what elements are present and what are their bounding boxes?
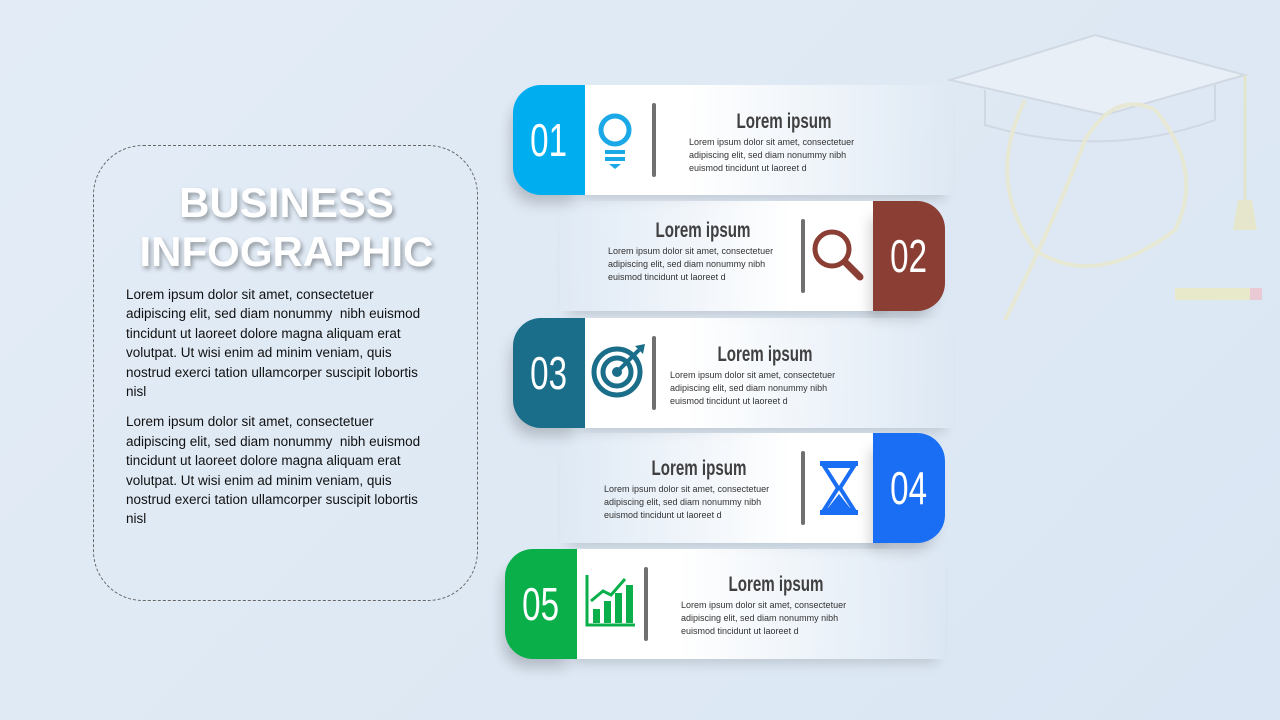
title: BUSINESS — [179, 179, 394, 226]
card 05: Lorem ipsum dolor sit amet, consectetuer adipiscing elit, sed diam nonummy nibh euismod tincidunt ut laoreet d — [681, 600, 846, 636]
card 02: 02 — [891, 230, 927, 282]
card 04: Lorem ipsum — [652, 457, 746, 480]
card 04 — [565, 433, 945, 557]
watermark: graduation cap logo — [946, 34, 1262, 321]
card 04: Lorem ipsum dolor sit amet, consectetuer adipiscing elit, sed diam nonummy nibh euismod tincidunt ut laoreet d — [604, 484, 769, 520]
icon: magnifier — [812, 230, 864, 280]
icon: hourglass — [820, 461, 858, 515]
card 03 — [504, 318, 948, 442]
card 04: 04 — [891, 462, 927, 514]
body text: adipiscing elit, sed diam nonummy nibh euismod — [126, 434, 420, 449]
card 05: 05 — [523, 578, 559, 630]
body text — [126, 287, 420, 526]
card 01 — [504, 85, 948, 210]
body text: nisl — [126, 511, 146, 526]
card 01: Lorem ipsum dolor sit amet, consectetuer adipiscing elit, sed diam nonummy nibh euismod tincidunt ut laoreet d — [689, 137, 854, 173]
panel: intro box — [93, 145, 478, 601]
card 02: Lorem ipsum dolor sit amet, consectetuer adipiscing elit, sed diam nonummy nibh euismod tincidunt ut laoreet d — [608, 246, 773, 282]
card 05 — [496, 549, 940, 674]
icon: bar chart — [586, 575, 635, 626]
body text: adipiscing elit, sed diam nonummy nibh euismod — [126, 306, 420, 321]
card 01: Lorem ipsum — [737, 110, 831, 133]
icon: target — [592, 344, 645, 398]
card 03: 03 — [531, 347, 567, 399]
body text: nisl — [126, 384, 146, 399]
card 01: 01 — [531, 114, 567, 166]
body text: tincidunt ut laoreet dolore magna aliquam erat — [126, 326, 401, 341]
body text: tincidunt ut laoreet dolore magna aliquam erat — [126, 453, 401, 468]
card 02 — [565, 201, 945, 324]
card 03: Lorem ipsum — [718, 343, 812, 366]
icon: light bulb — [598, 114, 632, 169]
body text: nostrud exerci tation ullamcorper suscipit lobortis — [126, 365, 418, 380]
title: INFOGRAPHIC — [140, 228, 434, 275]
body text: nostrud exerci tation ullamcorper suscipit lobortis — [126, 492, 418, 507]
body text: Lorem ipsum dolor sit amet, consectetuer — [126, 287, 374, 302]
card 05: Lorem ipsum — [729, 573, 823, 596]
card 03: Lorem ipsum dolor sit amet, consectetuer adipiscing elit, sed diam nonummy nibh euismod tincidunt ut laoreet d — [670, 370, 835, 406]
body text: volutpat. Ut wisi enim ad minim veniam, quis — [126, 473, 392, 488]
card 02: Lorem ipsum — [656, 219, 750, 242]
body text: volutpat. Ut wisi enim ad minim veniam, quis — [126, 345, 392, 360]
title — [140, 179, 436, 275]
body text: Lorem ipsum dolor sit amet, consectetuer — [126, 414, 374, 429]
